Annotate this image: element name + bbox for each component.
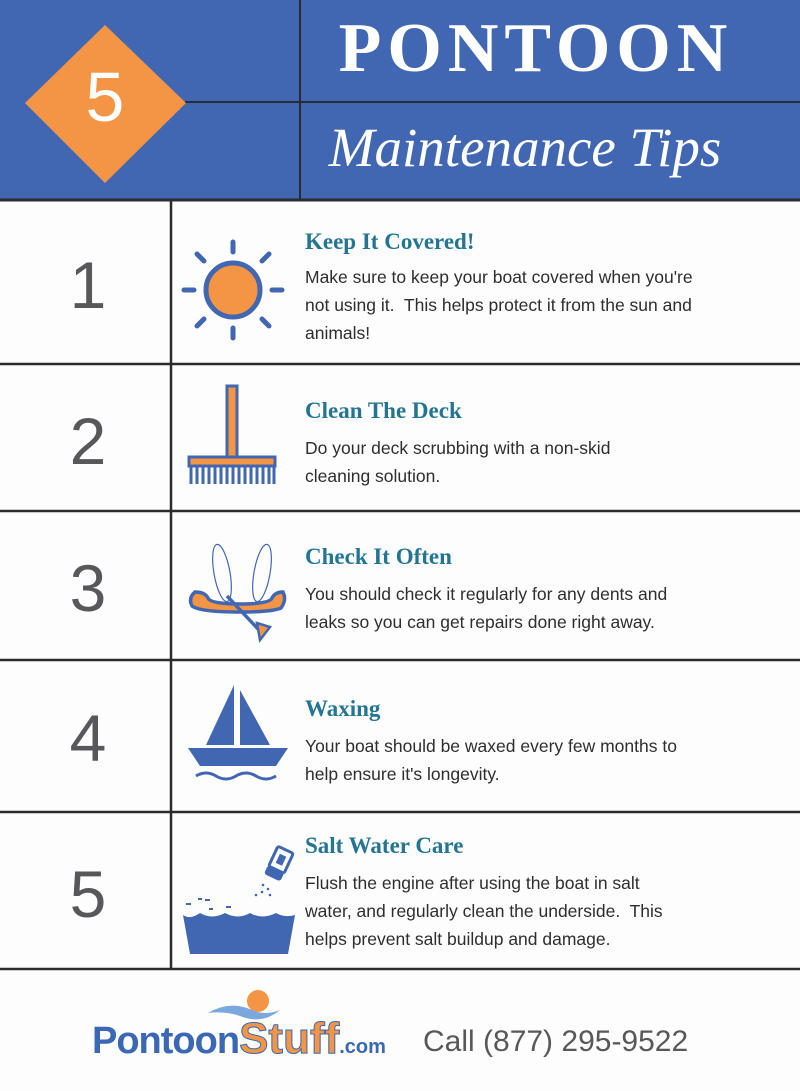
tip 1 <box>70 229 693 343</box>
icon: sun <box>184 242 282 338</box>
tip 1: Keep It Covered! <box>305 229 474 254</box>
phone: Call (877) 295-9522 <box>423 1025 688 1058</box>
icon: sailboat <box>188 685 288 779</box>
tip 1: 1 <box>70 248 106 322</box>
tip 3: Check It Often <box>305 544 452 569</box>
subtitle: Maintenance Tips <box>329 117 721 178</box>
icon: salt water <box>183 846 295 954</box>
icon: deck brush <box>189 386 275 484</box>
tip 4 <box>70 696 677 784</box>
badge number: 5 <box>86 58 124 136</box>
logo text: PontoonStuff.com <box>92 1014 386 1063</box>
tip 1: Make sure to keep your boat covered when you're not using it. This helps protect it from the sun and animals! <box>305 267 693 343</box>
title: PONTOON: PONTOON <box>339 10 733 87</box>
tip 3: 3 <box>70 551 106 625</box>
tip 4: Your boat should be waxed every few months to help ensure it's longevity. <box>305 736 677 784</box>
tip 5 <box>70 833 663 949</box>
icon: canoe <box>191 543 285 640</box>
tip 3: You should check it regularly for any dents and leaks so you can get repairs done right away. <box>305 584 667 632</box>
tip 5: 5 <box>70 857 106 931</box>
tip 2: 2 <box>70 404 106 478</box>
header band <box>0 0 800 200</box>
tip 2: Clean The Deck <box>305 398 462 423</box>
diamond badge <box>25 25 186 183</box>
tip 2 <box>70 398 610 486</box>
tip 3 <box>70 544 667 632</box>
tip 5: Flush the engine after using the boat in salt water, and regularly clean the underside. This helps prevent salt buildup and damage. <box>305 873 663 949</box>
tip 2: Do your deck scrubbing with a non-skid cleaning solution. <box>305 438 610 486</box>
tip 5: Salt Water Care <box>305 833 463 858</box>
tip 4: 4 <box>70 701 106 775</box>
tip 4: Waxing <box>305 696 380 721</box>
logo graphic <box>208 990 280 1019</box>
